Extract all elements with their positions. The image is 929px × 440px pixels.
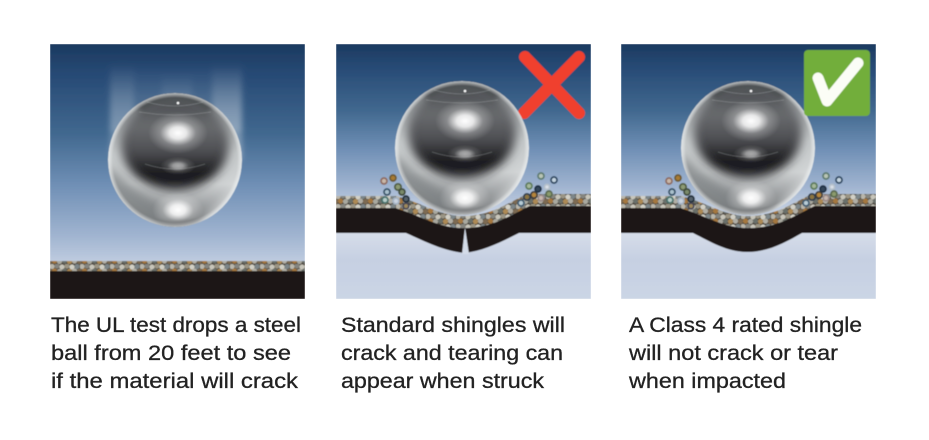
lower background xyxy=(336,233,591,299)
caption: standard shingles xyxy=(341,313,565,393)
caption: standard shingles: appear when struck xyxy=(341,369,544,393)
steel ball on impact xyxy=(392,72,532,218)
sky background xyxy=(50,44,305,299)
icon: green check mark xyxy=(804,50,870,116)
sky background xyxy=(621,44,876,234)
lower background xyxy=(621,233,876,299)
caption: Class 4 shingle: will not crack or tear xyxy=(628,341,838,365)
caption: UL test: The UL test drops a steel xyxy=(51,313,301,337)
steel ball falling xyxy=(105,84,245,230)
shingle with dent, no crack xyxy=(621,200,876,252)
loose granules xyxy=(666,173,842,209)
caption: Class 4 shingle: A Class 4 rated shingle xyxy=(629,313,862,337)
shingle with dent and crack xyxy=(336,200,591,254)
caption: UL test: if the material will crack xyxy=(51,369,298,393)
caption: standard shingles: Standard shingles will xyxy=(341,313,565,337)
caption: Class 4 shingle: when impacted xyxy=(628,369,786,393)
caption: standard shingles: crack and tearing can xyxy=(341,341,563,365)
loose granules xyxy=(381,173,557,209)
panel: Class 4 shingle holds xyxy=(621,44,876,299)
steel ball on impact xyxy=(678,72,818,218)
caption: UL test: ball from 20 feet to see xyxy=(51,341,291,365)
motion trails above ball xyxy=(110,62,242,159)
caption: Class 4 shingle xyxy=(628,313,862,393)
icon: red X xyxy=(524,57,579,113)
panel: standard shingle cracks xyxy=(336,44,591,299)
shingle: flat, undamaged xyxy=(50,261,305,299)
caption: UL test xyxy=(51,313,301,393)
panel: UL drop test xyxy=(50,44,305,299)
sky background xyxy=(336,44,591,234)
